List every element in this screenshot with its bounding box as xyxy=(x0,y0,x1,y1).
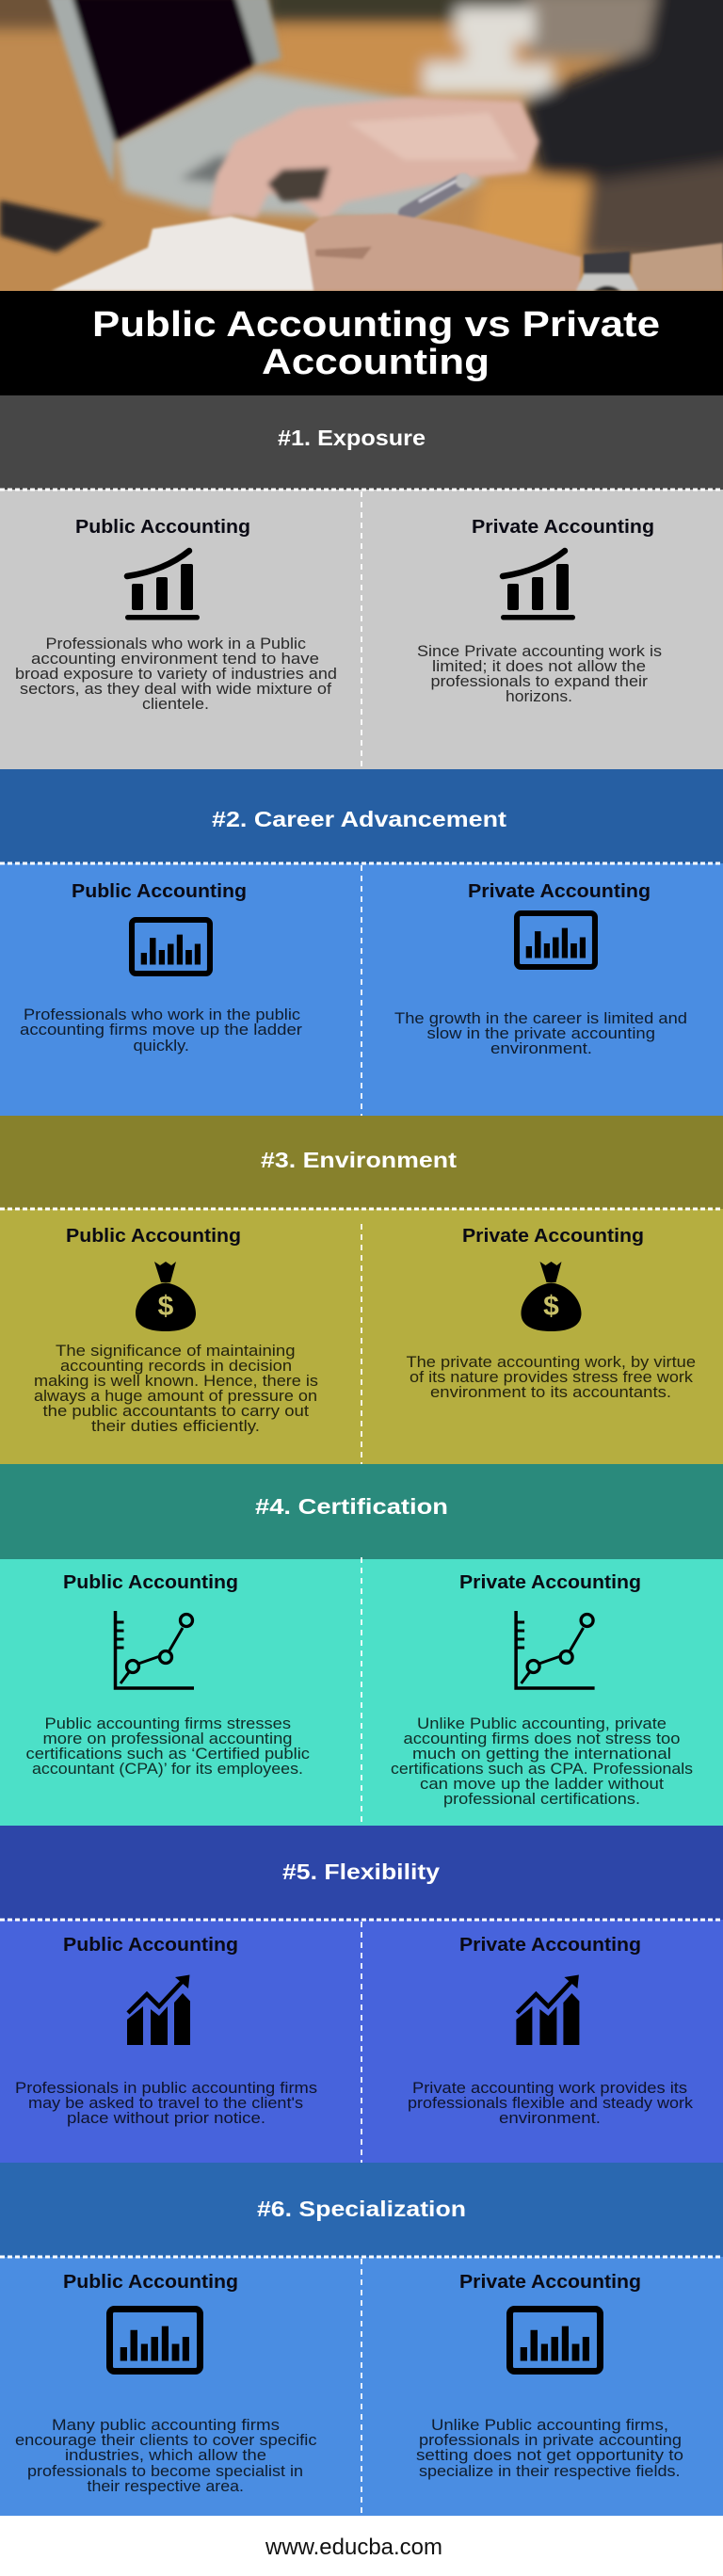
subheading: private: Private Accounting xyxy=(472,517,654,538)
text: private certification: can move up the ladder without xyxy=(420,1776,664,1793)
text: public environment: accounting records in decision xyxy=(60,1358,292,1375)
text: private career: environment. xyxy=(490,1040,592,1057)
icon: tablet chart, private xyxy=(517,913,595,967)
icon: growth bars with arrow, public xyxy=(127,1975,190,2045)
text: private specialization: setting does not get opportunity to xyxy=(416,2447,683,2464)
subheading: public: Public Accounting xyxy=(63,1572,238,1593)
text: private exposure xyxy=(417,643,662,705)
subheading: public: Public Accounting xyxy=(63,1935,238,1956)
panel background: Exposure xyxy=(0,490,723,769)
text: public exposure: sectors, as they deal with wide mixture of xyxy=(20,681,331,698)
text: public flexibility: may be asked to travel to the client's xyxy=(28,2095,303,2112)
text: private environment: The private accounting work, by virtue xyxy=(407,1354,696,1371)
text: public environment: always a huge amount of pressure on xyxy=(34,1388,317,1405)
text: private flexibility: environment. xyxy=(499,2110,601,2127)
text: public specialization xyxy=(15,2417,316,2495)
text: public exposure: clientele. xyxy=(142,696,209,713)
text: public certification: certifications such as ‘Certified public xyxy=(26,1746,310,1763)
subheading: private: Private Accounting xyxy=(459,1572,641,1593)
header band: Environment xyxy=(0,1116,723,1209)
panel background: Specialization xyxy=(0,2257,723,2516)
text: public flexibility: place without prior notice. xyxy=(67,2110,265,2127)
icon: bars with rising curve, public xyxy=(125,551,200,620)
text: public environment: the public accountants to carry out xyxy=(43,1403,309,1420)
text: public exposure: broad exposure to variety of industries and xyxy=(15,666,337,683)
text: private flexibility xyxy=(408,2080,694,2127)
text: public certification: more on professional accounting xyxy=(43,1731,292,1747)
section 3: Environment xyxy=(0,1116,723,1464)
section 1: Exposure xyxy=(0,395,723,769)
icon: money bag, public xyxy=(136,1262,196,1331)
hero photo: hands writing beside a laptop xyxy=(0,0,723,291)
text: private specialization xyxy=(416,2417,683,2480)
icon: bars with rising curve, private xyxy=(501,551,575,620)
text: private certification: certifications such as CPA. Professionals xyxy=(391,1761,693,1778)
text: public certification: Public accounting firms stresses xyxy=(45,1715,291,1732)
subheading: private: Private Accounting xyxy=(462,1226,644,1247)
panel background: Career Advancement xyxy=(0,863,723,1116)
subheading: public: Public Accounting xyxy=(66,1226,241,1247)
text: private career xyxy=(394,1010,687,1057)
section 2: Career Advancement xyxy=(0,769,723,1116)
text: private environment: environment to its accountants. xyxy=(430,1384,671,1401)
text: private specialization: Unlike Public accounting firms, xyxy=(431,2417,668,2434)
text: public career: quickly. xyxy=(134,1038,189,1055)
icon: line chart, public xyxy=(115,1611,194,1688)
header band: Career Advancement xyxy=(0,769,723,863)
text: private career: The growth in the career is limited and xyxy=(394,1010,687,1027)
heading: Environment: #3. Environment xyxy=(261,1148,457,1172)
text: public specialization: professionals to become specialist in xyxy=(27,2463,303,2480)
text: private specialization: professionals in private accounting xyxy=(419,2432,682,2449)
footer: website: www.educba.com xyxy=(265,2535,442,2560)
panel background: Environment xyxy=(0,1209,723,1464)
subheading: public: Public Accounting xyxy=(63,2272,238,2293)
heading: Certification: #4. Certification xyxy=(255,1494,448,1519)
text: private environment xyxy=(407,1354,696,1401)
text: public environment xyxy=(34,1343,318,1435)
subheading: public: Public Accounting xyxy=(75,517,250,538)
text: public specialization: Many public accounting firms xyxy=(52,2417,280,2434)
text: public environment: making is well known. Hence, there is xyxy=(34,1373,318,1390)
text: public exposure xyxy=(15,636,337,713)
section 4: Certification xyxy=(0,1464,723,1826)
header band: Flexibility xyxy=(0,1826,723,1920)
subheading: private: Private Accounting xyxy=(459,2272,641,2293)
text: public certification: accountant (CPA)’ for its employees. xyxy=(32,1761,303,1778)
section 6: Specialization xyxy=(0,2163,723,2516)
text: public flexibility: Professionals in public accounting firms xyxy=(15,2080,317,2097)
panel background: Flexibility xyxy=(0,1920,723,2163)
text: public specialization: industries, which allow the xyxy=(65,2447,266,2464)
icon: money bag, private xyxy=(522,1262,582,1331)
text: private exposure: professionals to expand their xyxy=(431,673,649,690)
text: public exposure: Professionals who work in a Public xyxy=(45,636,306,652)
text: public flexibility xyxy=(15,2080,317,2127)
subheading: public: Public Accounting xyxy=(72,881,247,902)
header band: Specialization xyxy=(0,2163,723,2257)
subheading: private: Private Accounting xyxy=(459,1935,641,1956)
text: public specialization: encourage their clients to cover specific xyxy=(15,2432,316,2449)
subheading: private: Private Accounting xyxy=(468,881,651,902)
text: public certification xyxy=(26,1715,310,1778)
text: public environment: their duties efficiently. xyxy=(91,1418,260,1435)
header band: Exposure xyxy=(0,395,723,490)
text: private career: slow in the private accounting xyxy=(427,1025,655,1042)
text: public career: Professionals who work in the public xyxy=(24,1006,300,1023)
icon: line chart, private xyxy=(516,1611,595,1688)
text: private specialization: specialize in their respective fields. xyxy=(419,2463,680,2480)
text: private flexibility: Private accounting work provides its xyxy=(412,2080,687,2097)
text: public exposure: accounting environment tend to have xyxy=(31,651,319,668)
title band: Public Accounting vs Private xyxy=(92,305,660,345)
text: private certification: accounting firms does not stress too xyxy=(403,1731,680,1747)
text: private certification: Unlike Public accounting, private xyxy=(417,1715,667,1732)
panel background: Certification xyxy=(0,1559,723,1826)
text: public environment: The significance of maintaining xyxy=(56,1343,296,1360)
icon: growth bars with arrow, private xyxy=(516,1975,579,2045)
text: public specialization: their respective area. xyxy=(87,2478,244,2495)
icon: tablet chart, public xyxy=(132,920,210,974)
icon: tablet chart, public xyxy=(109,2309,200,2371)
icon: money bag, private: $ xyxy=(543,1291,559,1322)
text: private exposure: Since Private accounting work is xyxy=(417,643,662,660)
header band: Certification xyxy=(0,1464,723,1559)
text: private exposure: horizons. xyxy=(506,688,572,705)
section 5: Flexibility xyxy=(0,1826,723,2163)
heading: Flexibility: #5. Flexibility xyxy=(282,1860,440,1884)
text: private certification: professional certifications. xyxy=(443,1791,640,1808)
title band xyxy=(0,291,723,395)
text: private certification xyxy=(391,1715,693,1808)
title band: Accounting xyxy=(262,343,490,382)
icon: tablet chart, private xyxy=(510,2309,601,2371)
text: private flexibility: professionals flexible and steady work xyxy=(408,2095,694,2112)
heading: Specialization: #6. Specialization xyxy=(257,2197,466,2221)
text: private exposure: limited; it does not allow the xyxy=(432,658,646,675)
heading: Exposure: #1. Exposure xyxy=(278,426,426,450)
text: private certification: much on getting the international xyxy=(412,1746,671,1763)
text: public career: accounting firms move up the ladder xyxy=(20,1022,303,1038)
text: private environment: of its nature provides stress free work xyxy=(410,1369,694,1386)
text: public career xyxy=(20,1006,303,1055)
icon: money bag, public: $ xyxy=(158,1291,174,1322)
heading: Career Advancement: #2. Career Advancement xyxy=(212,807,506,831)
